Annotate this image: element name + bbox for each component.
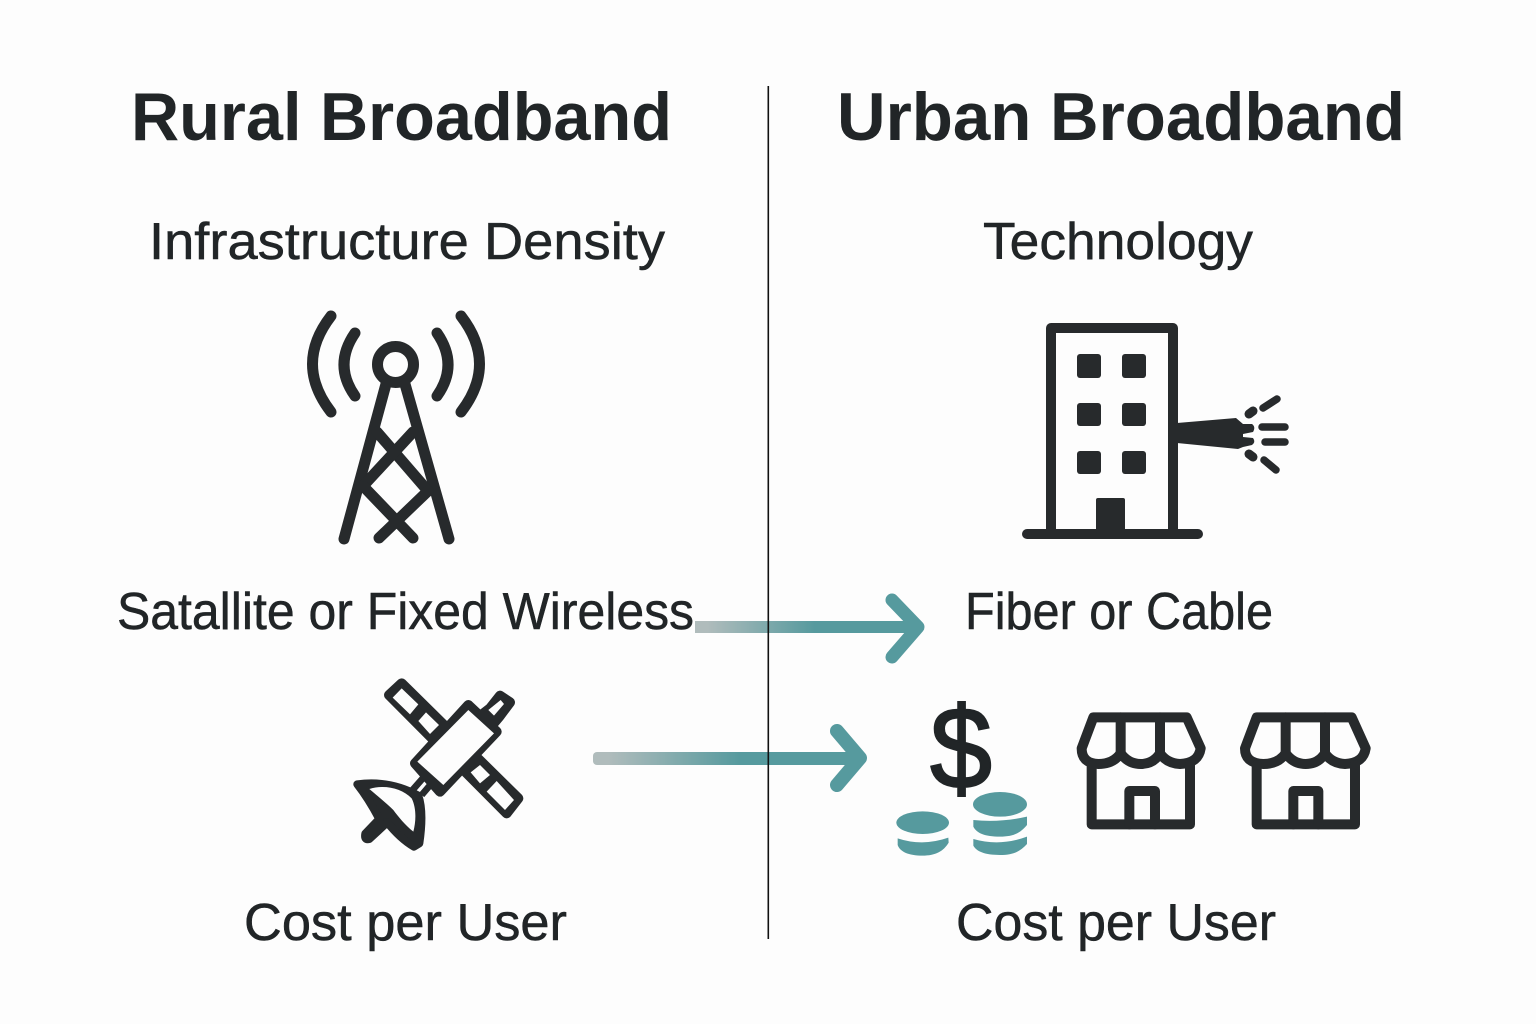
arrow: satellite to cost — [593, 731, 860, 785]
icon: satellite — [357, 683, 518, 847]
panel: rural broadband — [117, 79, 694, 952]
panel: urban broadband — [837, 79, 1405, 952]
icon: building with fiber cable — [1027, 328, 1285, 534]
icon: coin stacks — [896, 792, 1027, 856]
label: infrastructure density: Infrastructure Density — [149, 213, 665, 271]
icon: cell tower — [312, 316, 480, 539]
heading: urban broadband: Urban Broadband — [837, 79, 1405, 155]
arrow: wireless to fiber — [695, 600, 918, 657]
label: fiber or cable: Fiber or Cable — [965, 583, 1273, 641]
label: cost per user (urban): Cost per User — [956, 894, 1276, 952]
heading: rural broadband: Rural Broadband — [131, 79, 672, 155]
icon: dollar sign: $ — [930, 683, 992, 813]
label: cost per user (rural): Cost per User — [244, 894, 567, 952]
label: technology: Technology — [983, 213, 1253, 271]
center divider line — [768, 86, 769, 939]
icon: storefront left — [1082, 717, 1201, 824]
icon: storefront right — [1245, 717, 1366, 824]
label: satellite or fixed wireless: Satallite or Fixed Wireless — [117, 583, 694, 641]
